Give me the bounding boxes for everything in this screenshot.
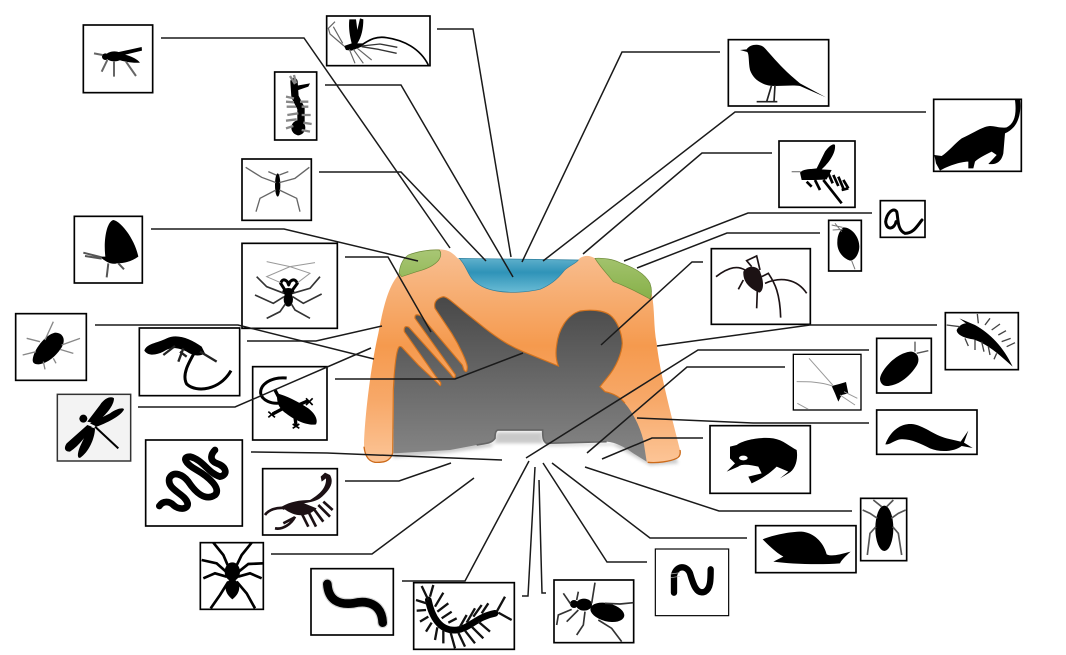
icon: beetle — [16, 314, 86, 380]
icon: millipede — [311, 569, 393, 635]
icon: butterfly — [74, 216, 142, 283]
rock body — [364, 249, 680, 463]
cave floor shadow — [393, 432, 678, 465]
icon: cockroach — [861, 498, 907, 561]
leader lines — [95, 29, 937, 596]
icon: wasp with striped abdomen — [779, 141, 855, 207]
icon: bird — [728, 40, 829, 106]
icon: ground beetle — [554, 580, 634, 643]
entrance notch edge — [477, 430, 607, 445]
icon: caddis larva — [275, 72, 317, 140]
icon: tarantula — [200, 543, 263, 609]
icon: snail — [756, 526, 856, 573]
leg rims — [364, 447, 680, 463]
icon: wasp — [83, 25, 153, 93]
cave cross-section diagram — [364, 249, 680, 465]
cave void — [393, 297, 647, 462]
icon: thread worm — [880, 201, 925, 237]
icon: lizard — [139, 328, 240, 396]
cave wall outline — [393, 297, 625, 453]
icon: scorpion — [263, 469, 337, 535]
icon: frog — [710, 426, 810, 493]
surface pond — [459, 258, 578, 292]
icon: midge — [327, 16, 430, 66]
icon: snake — [146, 440, 242, 526]
icon: centipede — [414, 583, 514, 649]
surface vegetation left — [399, 250, 441, 277]
icon: dragonfly — [57, 394, 131, 461]
icon: cat — [934, 99, 1021, 171]
icon: rotifer — [829, 220, 861, 271]
icon: water strider — [242, 159, 311, 220]
icon: black spider — [711, 249, 810, 324]
icon: earthworm — [655, 549, 729, 616]
icon: gecko — [253, 367, 327, 440]
icon: harvest spider — [242, 243, 337, 328]
surface vegetation right — [595, 258, 652, 299]
icon: slug — [877, 410, 977, 454]
icon: cave cricket — [793, 354, 861, 410]
icon: isopod — [877, 338, 931, 393]
icon: bristly centipede — [945, 313, 1018, 370]
